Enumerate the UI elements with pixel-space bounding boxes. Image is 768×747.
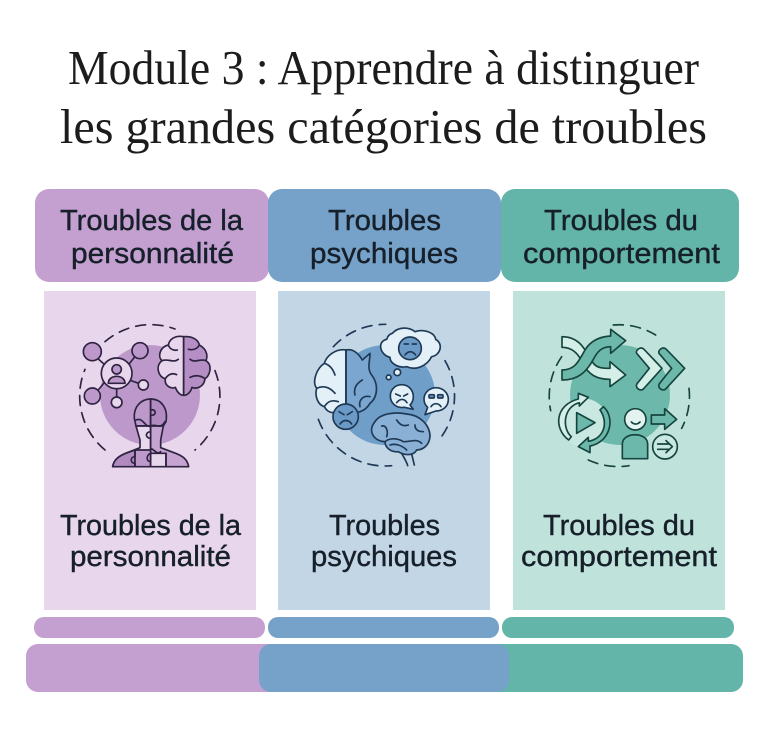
icon: brains and emotion faces [315, 324, 455, 466]
icon: network, brain and puzzle head [80, 325, 220, 467]
label: comportement [521, 510, 717, 573]
header: psychiques [268, 189, 501, 282]
label: psychiques: Troubles [329, 510, 440, 542]
title: Module 3 : Apprendre à distinguer [68, 40, 699, 95]
label: comportement: Troubles du [543, 510, 695, 542]
header: comportement: comportement [523, 238, 720, 270]
label: psychiques [311, 510, 457, 573]
thin colour bars [34, 617, 734, 638]
header: comportement [501, 189, 739, 282]
header: personnalité: personnalité [71, 238, 234, 270]
large overlapping colour bars [26, 644, 743, 692]
header: comportement: Troubles du [544, 205, 698, 237]
title: les grandes catégories de troubles [60, 99, 707, 154]
icon: arrows, play cycle and person [549, 325, 689, 467]
label: personnalité: Troubles de la [60, 510, 241, 542]
label: psychiques: psychiques [311, 541, 457, 573]
header: psychiques: Troubles [328, 205, 441, 237]
column headers [35, 189, 739, 282]
label: personnalité: personnalité [70, 541, 231, 573]
header: personnalité [35, 189, 269, 282]
header: psychiques: psychiques [310, 238, 458, 270]
panel: psychiques [278, 291, 490, 610]
label: comportement: comportement [521, 541, 717, 573]
label: personnalité [60, 510, 241, 573]
header: personnalité: Troubles de la [60, 205, 243, 237]
title [60, 40, 707, 154]
panel: personnalité [44, 291, 256, 610]
panel: comportement [513, 291, 725, 610]
